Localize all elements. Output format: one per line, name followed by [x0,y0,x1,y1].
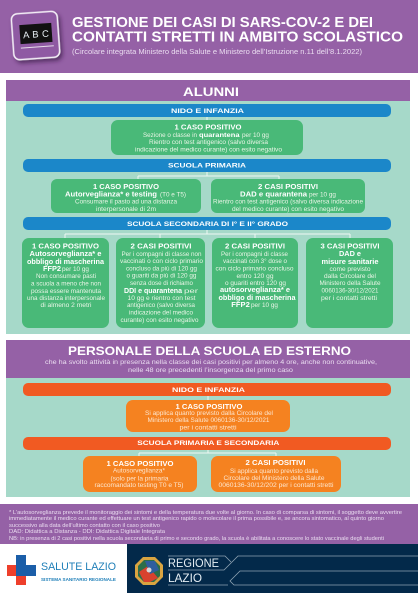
box: secondaria 1 caso positivo: FFP2 [43,266,61,273]
box: personale nido 1 caso positivo: Si applica quanto previsto dalla Circolare del [145,410,273,417]
panel: note: NB: in presenza di 2 casi positivi nella scuola secondaria di primo e secondo grado, la scuola è abilitata a conoscere lo stato vaccinale degli studenti [9,536,384,542]
box: primaria 1 caso positivo: (T0 e T5) [160,192,186,198]
box: personale 1 caso positivo: (solo per la primaria [110,475,169,482]
title [72,14,403,45]
box: secondaria 3 casi positivi: dalla Circolare del [324,273,376,280]
box: personale 2 casi positivi: Si applica quanto previsto dalla [230,468,319,475]
text: descrizione personale: che ha svolto attività in presenza nella classe dei casi positivi per almeno 4 ore, anche non continuative, [45,359,377,366]
box: nido 1 caso positivo: per 10 gg [242,132,270,139]
box: secondaria 3 casi positivi: 3 CASI POSITIVI [320,244,380,251]
box: nido 1 caso positivo: indicazione del medico curante) con esito negativo [135,146,283,153]
box: personale nido 1 caso positivo [126,400,290,432]
logo: salute lazio: SISTEMA SANITARIO REGIONALE [41,577,117,583]
icon: regional emblem [135,557,163,585]
box: secondaria 1 caso positivo: possa essere mantenuta [31,288,102,295]
box: secondaria 2 casi positivi non vaccinati: concluso da più di 120 gg [126,265,198,272]
box: personale 2 casi positivi: 2 CASI POSITIVI [246,460,306,467]
logo: regione lazio: LAZIO [168,571,202,585]
box: secondaria 3 casi positivi: 0060136-30/12/2021 [322,288,379,294]
box: secondaria 3 casi positivi: Ministero della Salute [320,280,381,287]
box: secondaria 1 caso positivo: di almeno 2 metri [40,302,92,309]
box: personale 2 casi positivi: 0060136-30/12/202 per i contatti stretti [218,482,334,489]
box: primaria 2 casi positivi: del medico curante) con esito negativo [232,206,345,213]
box: secondaria 3 casi positivi: come previsto [330,266,371,273]
box: secondaria 2 casi positivi vaccinati: FFP2 [231,302,250,309]
box: personale nido 1 caso positivo: Ministero della Salute 0060136-30/12/2021 [148,417,270,424]
box: secondaria 2 casi positivi vaccinati: obbligo di mascherina [218,295,296,302]
box: primaria 2 casi positivi: 2 CASI POSITIVI [258,184,318,191]
box: secondaria 1 caso positivo [22,238,109,328]
box: primaria 1 caso positivo: interpersonale di 2m [96,206,156,213]
box: nido 1 caso positivo: quarantena [199,132,240,139]
box: secondaria 2 casi positivi vaccinati: con ciclo primario concluso [216,265,294,272]
bar: scuola secondaria [23,217,391,230]
icon: blackboard ABC [11,11,60,60]
box: secondaria 2 casi positivi non vaccinati: indicazione del medico [129,309,194,316]
panel: personale della scuola ed esterno [6,340,410,497]
box: secondaria 1 caso positivo: Autosorveglianza* e [30,251,102,258]
title: GESTIONE DEI CASI DI SARS-COV-2 E DEI [72,14,373,31]
box: primaria 1 caso positivo: Autorveglianza* e testing [65,192,157,198]
box: personale 1 caso positivo: 1 CASO POSITIVO [106,461,174,468]
box: secondaria 2 casi positivi non vaccinati: 2 CASI POSITIVI [130,244,192,251]
bar: nido e infanzia personale: NIDO E INFANZIA [172,387,245,394]
box: primaria 1 caso positivo [51,179,201,213]
box: personale nido 1 caso positivo: 1 CASO POSITIVO [176,404,243,411]
panel: note: DAD: Didattica a Distanza - DDI: Didattica Digitale Integrata [9,529,165,535]
box: secondaria 2 casi positivi non vaccinati: per [184,288,198,295]
box: secondaria 1 caso positivo: 1 CASO POSITIVO [32,244,100,251]
subtitle: (Circolare integrata Ministero della Salute e Ministero dell’Istruzione n.11 dell’8.1.2022) [72,47,362,56]
box: secondaria 2 casi positivi vaccinati: autosorveglianza* e [220,287,290,294]
box: secondaria 2 casi positivi non vaccinati: vaccinati o con ciclo primario [120,258,204,265]
box: secondaria 1 caso positivo: per 10 gg [62,266,90,273]
box: primaria 2 casi positivi: Rientro con test antigenico (salvo diversa indicazione [213,199,364,206]
icon: blackboard ABC: A B C [23,29,49,41]
box: secondaria 2 casi positivi non vaccinati: DDI e quarantena [124,288,182,295]
box: secondaria 3 casi positivi: misure sanitarie [322,259,379,266]
box: secondaria 2 casi positivi vaccinati: o guariti entro 120 gg [225,280,287,287]
box: secondaria 2 casi positivi non vaccinati: curante) con esito negativo [120,317,199,324]
box: nido 1 caso positivo: Rientro con test antigenico (salvo diversa [149,139,269,146]
box: secondaria 1 caso positivo: una distanza interpersonale [27,295,106,302]
box: primaria 2 casi positivi: DAD e quarantena [240,192,307,198]
box: secondaria 2 casi positivi non vaccinati: antigenico (salvo diversa [127,302,196,309]
box: secondaria 1 caso positivo: a scuola a meno che non [31,280,102,287]
logo: regione lazio [127,544,418,593]
box: secondaria 2 casi positivi vaccinati: per 10 gg [251,302,279,309]
box: primaria 2 casi positivi [211,179,365,213]
box: secondaria 1 caso positivo: Non consumare pasti [36,273,96,280]
text: descrizione personale: nelle 48 ore precedenti l’insorgenza del primo caso [128,367,293,374]
box: secondaria 2 casi positivi non vaccinati: senza dose di richiamo [130,280,194,287]
box: personale 1 caso positivo: raccomandato testing T0 e T5) [94,482,184,489]
box: primaria 2 casi positivi: per 10 gg [309,192,337,198]
heading: alunni: ALUNNI [183,85,239,99]
logo: salute lazio [0,544,127,593]
box: secondaria 2 casi positivi non vaccinati: o guariti da più di 120 gg [126,273,197,280]
box: nido 1 caso positivo: Sezione o classe in [143,132,198,139]
logo: regione lazio: REGIONE [168,556,219,570]
panel: note: * L’autosorveglianza prevede il monitoraggio dei sintomi e della temperatura due volte al giorno. In caso di comparsa di sintomi, il soggetto deve avvertire [9,510,402,516]
box: personale 1 caso positivo: Autosorveglianza* [113,468,166,475]
box: primaria 1 caso positivo: Consumare il pasto ad una distanza [75,199,178,206]
box: secondaria 2 casi positivi vaccinati: 2 CASI POSITIVI [225,244,285,251]
logo: salute lazio: SALUTE LAZIO [41,561,116,573]
title: CONTATTI STRETTI IN AMBITO SCOLASTICO [72,28,403,45]
box: secondaria 2 casi positivi vaccinati: entro 120 gg [236,273,274,280]
box: secondaria 2 casi positivi vaccinati: Per i compagni di classe [221,251,289,258]
box: secondaria 3 casi positivi: per i contatti stretti [321,295,377,302]
box: secondaria 2 casi positivi vaccinati [212,238,298,328]
bar: nido e infanzia personale [23,383,391,396]
bar: scuola primaria: SCUOLA PRIMARIA [168,163,246,170]
box: secondaria 2 casi positivi vaccinati: vaccinati con 3° dose o [223,258,288,265]
box: nido 1 caso positivo: 1 CASO POSITIVO [174,125,242,132]
box: secondaria 2 casi positivi non vaccinati: 10 gg e rientro con test [128,295,196,302]
box: personale 1 caso positivo [83,456,197,492]
box: secondaria 2 casi positivi non vaccinati [116,238,205,328]
panel: note: successivo alla data dell’ultimo contatto con il caso positivo [9,523,160,529]
bar: nido e infanzia: NIDO E INFANZIA [171,108,244,115]
box: primaria 1 caso positivo: 1 CASO POSITIVO [93,184,160,191]
box: personale 2 casi positivi [211,456,341,492]
bar: scuola primaria e secondaria personale [23,437,391,450]
box: secondaria 1 caso positivo: obbligo di mascherina [27,259,104,266]
heading: personale: PERSONALE DELLA SCUOLA ED ESTERNO [68,344,351,358]
bar: scuola primaria [23,159,391,172]
panel: note [0,504,418,544]
box: personale nido 1 caso positivo: per i contatti stretti [180,424,236,431]
panel: note: immediatamente il medico curante ed effettuare un test antigenico rapido o molecolare il prima possibile e, se ancora sintomatico, al quinto giorno [9,516,384,522]
box: nido 1 caso positivo [111,120,303,155]
header banner [0,0,418,73]
box: personale 2 casi positivi: Circolare del Ministero della Salute [224,475,325,482]
text: descrizione personale [45,359,377,374]
bar: scuola secondaria: SCUOLA SECONDARIA DI I° E II° GRADO [127,220,288,228]
panel: alunni [6,80,410,334]
box: secondaria 3 casi positivi [306,238,393,328]
bar: nido e infanzia [23,104,391,117]
box: secondaria 3 casi positivi: DAD e [339,251,361,258]
box: secondaria 2 casi positivi non vaccinati: Per i compagni di classe non [122,251,202,258]
bar: scuola primaria e secondaria personale: SCUOLA PRIMARIA E SECONDARIA [137,440,279,447]
icon: cross [7,555,36,585]
